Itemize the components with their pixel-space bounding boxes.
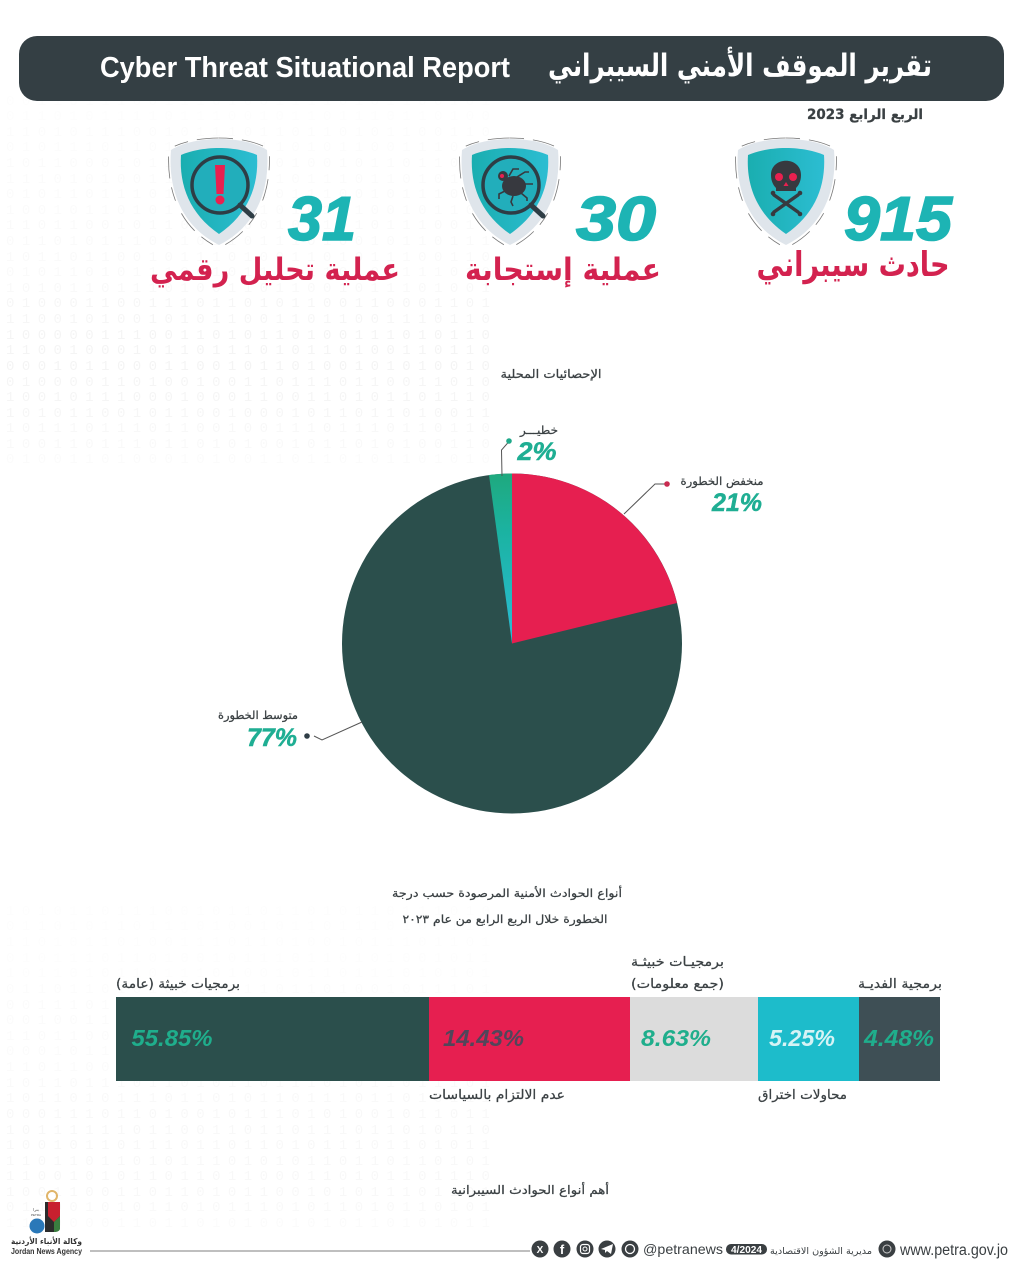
logo: jordan news agency: بترا <box>33 1207 39 1212</box>
text: 1011010111011010110111011010111 <box>6 1091 497 1107</box>
number: 31: 31 <box>288 185 356 254</box>
bar segment: info-gathering malware <box>630 955 758 1081</box>
text: 1100101001010110011011001110110 <box>6 312 497 328</box>
bar segment: ransomware <box>858 977 942 1081</box>
bar segment: intrusion attempts: محاولات اختراق <box>758 1088 847 1103</box>
text: 0101101011100101110110100111010 <box>6 265 497 281</box>
text: 1100100010110111010110100110110 <box>6 343 497 359</box>
text: 0001011000110010110100101010010 <box>6 359 497 375</box>
text: 0110010101101011101011010110101 <box>6 1200 497 1216</box>
heading: local statistics: الإحصائيات المحلية <box>500 367 602 381</box>
bar segment: ransomware: 4.48% <box>863 1025 934 1051</box>
text: 0001011011010110011010110101101 <box>6 1044 497 1060</box>
icon: whatsapp <box>622 1240 638 1258</box>
heading: incident types by severity: أنواع الحوادث الأمنية المرصودة حسب درجة <box>392 885 622 901</box>
icon: telegram <box>598 1240 616 1258</box>
text: 0001110110100101110101001011011 <box>6 1107 497 1123</box>
text: 1001011011101101101011101101011 <box>6 1138 497 1154</box>
text: 1101100011010101101110101001010 <box>6 1060 497 1076</box>
bar segment: info-gathering malware: برمجيـات خبيثـة <box>631 955 724 970</box>
text: 1001100110110101100101011101101 <box>6 1185 497 1201</box>
bar segment: ransomware: برمجية الفديـة <box>858 977 942 992</box>
callout: critical 2%: خطيـــر <box>519 423 558 438</box>
label: digital analysis operation: عملية تحليل رقمي <box>150 252 400 288</box>
text: 1001011010111001101011100101101 <box>6 203 497 219</box>
icon: x: X <box>537 1245 544 1256</box>
text: 0011101001101101010010110110100 <box>6 998 497 1014</box>
number: 915: 915 <box>844 185 954 254</box>
logo: jordan news agency: وكالة الأنباء الأردنية <box>11 1236 82 1246</box>
number: 30: 30 <box>576 185 656 254</box>
text: 1010110111010011011001011101001 <box>6 281 497 297</box>
text: 1011101110110010011101110110110 <box>6 421 497 437</box>
label: cyber incident: حادث سيبراني <box>756 245 950 285</box>
icon: exclamation magnifier shield <box>169 138 269 248</box>
footer rule <box>90 1250 530 1252</box>
stacked bar chart <box>116 955 942 1103</box>
bar segment: intrusion attempts <box>758 997 859 1103</box>
stat: digital forensics <box>150 138 400 288</box>
text: 0101110110101001110101100111010 <box>6 140 497 156</box>
text: 0110101111011100101101110110100 <box>6 109 497 125</box>
text: 1110101001110110010111011010110 <box>6 172 497 188</box>
bar segment: info-gathering malware: 8.63% <box>641 1025 711 1051</box>
icon: x <box>532 1240 548 1258</box>
callout: medium severity 77% <box>218 708 362 752</box>
subtitle: quarter: الربع الرابع 2023 <box>807 107 923 123</box>
icon: skull shield <box>736 138 836 248</box>
arabic title: تقرير الموقف الأمني السيبراني <box>548 46 932 84</box>
text: 1011010110111010010110111010101 <box>6 966 497 982</box>
callout: low severity 21% <box>624 474 764 517</box>
bar segment: policy non-compliance <box>429 997 630 1103</box>
stat: cyber incidents <box>736 138 954 285</box>
heading: main incident types: أهم أنواع الحوادث السيبرانية <box>451 1182 609 1198</box>
callout: low severity 21%: 21% <box>711 489 762 517</box>
icon: instagram <box>576 1240 594 1258</box>
icon: facebook: f <box>560 1242 565 1257</box>
bar segment: intrusion attempts: 5.25% <box>769 1025 835 1051</box>
text: 1101101101011101010110110110101 <box>6 1154 497 1170</box>
callout: critical 2% <box>502 423 558 476</box>
logo: jordan news agency: PETRA <box>31 1213 41 1217</box>
stat: response operations <box>460 138 661 288</box>
text: 1011000101101011101001011011001 <box>6 156 497 172</box>
date badge: 4/2024 <box>731 1245 762 1256</box>
text: 1001011100010001100110101101110 <box>6 390 497 406</box>
text: 1100000110110101001010110101011 <box>6 1216 497 1232</box>
text: 0011011100111010011110101100101 <box>6 94 497 110</box>
bar segment: general malware: برمجيات خبيثة (عامة) <box>116 977 240 992</box>
text: 0010011011010110111010010101101 <box>6 1013 497 1029</box>
heading: incident types by severity <box>392 885 622 927</box>
text: 0100110100010100110110101101010 <box>6 452 497 468</box>
handle: @petranews <box>643 1241 723 1257</box>
english title: Cyber Threat Situational Report <box>100 52 510 84</box>
website: www.petra.gov.jo <box>899 1242 1008 1259</box>
header banner <box>19 36 1004 101</box>
text: 1010110010110010001011011010011 <box>6 406 497 422</box>
label: response operation: عملية إستجابة <box>465 252 661 288</box>
text: 1000001110011010110100111010110 <box>6 328 497 344</box>
footer: social icons and links <box>532 1240 1008 1259</box>
text: 0100001101001001101110110011010 <box>6 375 497 391</box>
date badge <box>726 1244 767 1256</box>
text: 0100011001110110101100110001101 <box>6 296 497 312</box>
icon: facebook <box>554 1240 570 1258</box>
bar segment: general malware <box>116 977 429 1081</box>
heading: incident types by severity: الخطورة خلال الربع الرابع من عام ٢٠٢٣ <box>402 912 608 927</box>
callout: medium severity 77%: 77% <box>247 724 297 752</box>
text: 1011011001011101001101011100110 <box>6 250 497 266</box>
text: 1100101011011011000110101101110 <box>6 1169 497 1185</box>
text: 1101100101101011101100101011010 <box>6 1029 497 1045</box>
bar segment: info-gathering malware: (جمع معلومات) <box>631 977 724 992</box>
callout: low severity 21%: منخفض الخطورة <box>680 474 764 489</box>
text: 0101101110100110101110010111010 <box>6 187 497 203</box>
callout: critical 2%: 2% <box>516 438 556 466</box>
icon: globe <box>878 1240 896 1258</box>
bar segment: policy non-compliance: 14.43% <box>443 1025 524 1051</box>
bar segment: general malware: 55.85% <box>132 1025 212 1051</box>
text: 1101011100101110110110101100110 <box>6 125 497 141</box>
text: 0110110101001011101101001011101 <box>6 982 497 998</box>
logo: jordan news agency <box>11 1191 82 1256</box>
text: 1011111101100110110111011010110 <box>6 1123 497 1139</box>
bar segment: policy non-compliance: عدم الالتزام بالسياسات <box>429 1088 565 1103</box>
logo: jordan news agency: Jordan News Agency <box>11 1246 82 1256</box>
icon: bug magnifier shield <box>460 138 560 248</box>
text: 1011011101101011011101011011101 <box>6 1076 497 1092</box>
text: 1001101110110101001011010100110 <box>6 437 497 453</box>
callout: medium severity 77%: متوسط الخطورة <box>218 708 298 723</box>
text: 1101100101101110010110101110010 <box>6 218 497 234</box>
pie chart <box>342 473 682 814</box>
text: 0110101110010110111010010110111 <box>6 234 497 250</box>
department: مديرية الشؤون الاقتصادية <box>770 1246 872 1257</box>
text: 0101110110100101110110101001011 <box>6 951 497 967</box>
